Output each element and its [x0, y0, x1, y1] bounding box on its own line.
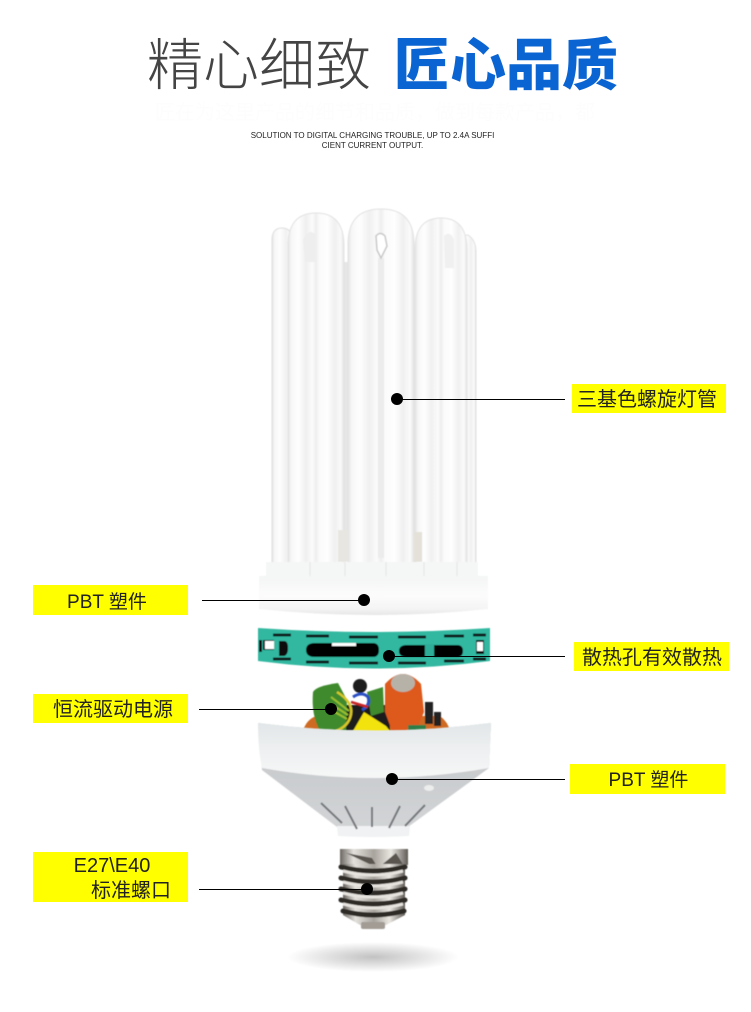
label: base: [33, 852, 188, 902]
label: driver: [33, 694, 188, 723]
label: PBT bottom: PBT 塑件: [609, 770, 688, 791]
callout line: tube: [391, 393, 565, 405]
callout line: vents: [383, 650, 565, 662]
callout line: collar: [202, 594, 370, 606]
callout line: base: [199, 883, 373, 895]
callout line: housing: [386, 773, 565, 785]
plastic collar: [259, 562, 488, 615]
english caption: SOLUTION TO DIGITAL CHARGING TROUBLE, UP TO 2.4A SUFFI: [251, 131, 494, 140]
label: base: 标准螺口: [91, 880, 171, 902]
label: tube: 三基色螺旋灯管: [577, 389, 717, 411]
label: tube: [572, 384, 726, 413]
callout line: driver: [199, 703, 337, 715]
title: bold blue part: 匠心品质: [394, 21, 618, 102]
label: vents: 散热孔有效散热: [582, 647, 722, 669]
teal vent ring: [258, 628, 490, 668]
title: light part: 精心细致: [147, 21, 371, 102]
ground shadow: [287, 942, 459, 972]
english caption: CIENT CURRENT OUTPUT.: [322, 141, 423, 150]
label: PBT top: PBT 塑件: [67, 592, 147, 613]
english caption: [251, 131, 494, 150]
label: base: E27\E40: [74, 855, 150, 877]
label: driver: 恒流驱动电源: [53, 699, 173, 721]
label: vents: [574, 642, 729, 671]
label: PBT top: [33, 585, 188, 615]
lower housing: [258, 723, 491, 837]
lamp tubes: [272, 209, 476, 572]
faint subtitle: 匠在为这里产品的细节和品质，做到每款产品，都: [155, 102, 595, 124]
label: PBT bottom: [570, 764, 725, 794]
screw base: [340, 849, 408, 929]
circuit board: [303, 674, 450, 731]
